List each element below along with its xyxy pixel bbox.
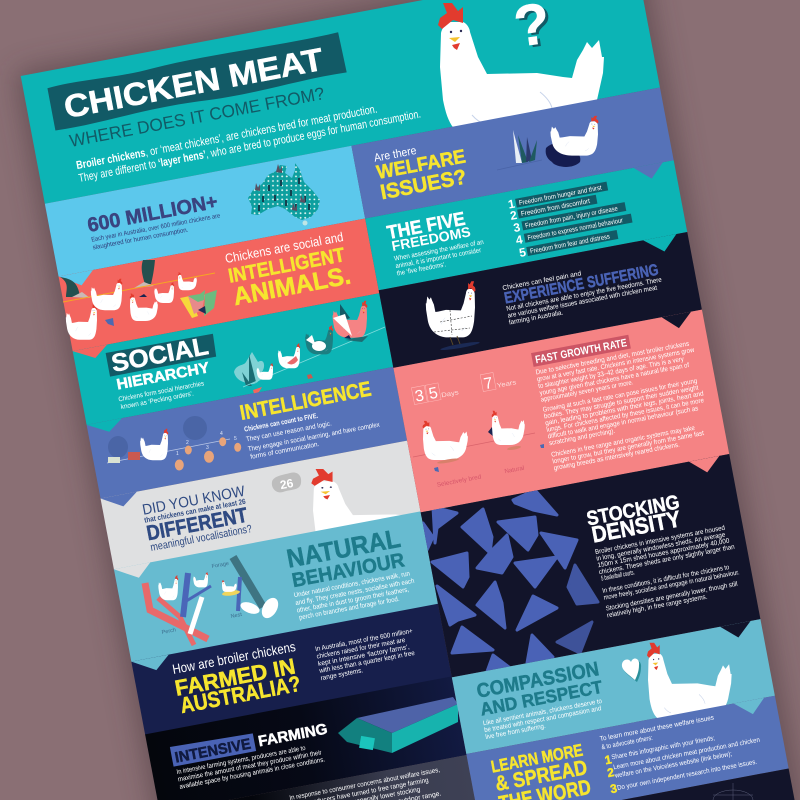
illustration: crowded hens from above [422, 490, 600, 671]
text: meaningful vocalisations? [149, 523, 253, 554]
icon: large hen [438, 3, 604, 140]
text: the ‘five freedoms’. [396, 261, 447, 278]
heading [170, 639, 305, 718]
list of freedoms: Freedom from pain, injury or disease [525, 205, 619, 230]
list of freedoms: Freedom from fear and distress [530, 233, 611, 255]
illustration: hen counting eggs: 3 [206, 445, 209, 451]
text: lungs. For chickens affected by these issues, it can be more [546, 397, 705, 434]
label: perch: Perch [161, 627, 176, 636]
text [482, 698, 605, 741]
heading [373, 136, 471, 204]
text: other, bathe in dust to groom their feathers, [296, 586, 410, 614]
text: 5 basketball courts. [601, 569, 635, 583]
text: longer to grow, but they are generally from the same fast [552, 430, 705, 465]
text: grow at a very fast rate. Chickens in intensive systems grow [536, 347, 695, 383]
heading: LEARN MORE [489, 741, 584, 776]
illustration: hen counting eggs: 4 [220, 431, 223, 437]
text: animal, it is important to consider [395, 247, 482, 270]
text: They engage in social learning, and have complex [247, 421, 381, 453]
panel: compassion and respect [451, 617, 778, 772]
text: to slaughter weight by 33–42 days of age. This is a very [538, 356, 685, 390]
map of Australia [248, 163, 320, 226]
subtitle: WHERE DOES IT COME FROM? [68, 83, 326, 151]
heading [224, 229, 353, 311]
list of freedoms: Freedom from hunger and thirst [518, 185, 602, 207]
illustration: hen and heart [622, 643, 732, 722]
illustration: two hens compared [413, 411, 544, 472]
heading [105, 331, 221, 394]
panel: intensive farming [145, 675, 478, 800]
text: DIFFERENT [145, 504, 249, 545]
text: be treated with respect and compassion and [484, 705, 602, 734]
panel: stocking density [420, 454, 760, 678]
illustration: natural behaviours [145, 557, 282, 645]
text: Share this infographic with your friends; [611, 735, 716, 761]
text: maximise the amount of meat they produce within their [177, 749, 323, 783]
heading: Chickens are social and [224, 229, 344, 266]
text: 2 [606, 765, 616, 780]
text: kept in intensive ‘factory farms’, [317, 644, 410, 668]
text: Chickens in free range and organic systems may take [551, 425, 696, 459]
heading: AUSTRALIA? [178, 671, 303, 718]
icon: target lines [713, 783, 753, 800]
heading: STOCKING [585, 491, 681, 530]
caption: known as ‘Pecking orders’. [120, 390, 194, 411]
statistic: 600 MILLION+ [86, 191, 219, 237]
heading: INTENSIVE [173, 736, 252, 767]
text: and fly. They create nests, socialise with each [295, 578, 415, 607]
list of freedoms: Freedom from discomfort [520, 198, 591, 218]
heading: FREEDOMS [390, 223, 472, 254]
text: Under natural conditions, chickens walk, run [293, 570, 411, 599]
list of freedoms: 4 [515, 232, 524, 247]
statistic caption: slaughtered for human consumption. [92, 227, 189, 252]
heading: NATURAL [284, 523, 403, 574]
panel: natural behaviour [113, 505, 440, 673]
text: To learn more about these welfare issues [599, 714, 715, 743]
title banner: CHICKEN MEAT [61, 41, 327, 125]
text: In these conditions, it is difficult for the chickens to [602, 564, 730, 595]
text: growing breeds as intensively reared chickens. [553, 442, 680, 472]
counter: 35 days: 3 [414, 387, 426, 406]
text: gain, leading to problems with their legs, joints, heart and [545, 390, 704, 427]
text: with less than a quarter kept in free [318, 650, 416, 675]
illustration: pecking order [234, 301, 385, 394]
caption [118, 380, 207, 411]
statistic caption [91, 212, 223, 252]
labels: selectively bred and natural [436, 465, 525, 489]
statistic caption: Each year in Australia, over 600 million chickens are [91, 212, 221, 244]
text: 1 [604, 752, 613, 767]
text: & to advocate others: [601, 735, 653, 751]
heading: COMPASSION [475, 658, 601, 703]
illustration: hen with speech bubble: 26 [279, 476, 295, 492]
heading: FAST GROWTH RATE [534, 337, 628, 366]
illustration: hen counting eggs: 1 [176, 451, 179, 457]
caption: Chickens form social hierarchies [118, 380, 205, 403]
illustration: hens on a perch [60, 260, 217, 340]
heading: THE FIVE [385, 209, 467, 244]
illustration: hen [426, 281, 480, 351]
labels: selectively bred and natural: Selectively bred [436, 473, 482, 489]
text: available space by housing animals in close conditions. [179, 756, 326, 791]
text [244, 402, 382, 461]
list of freedoms: Freedom to express normal behaviour [527, 217, 624, 242]
text: approximately seven years or more. [540, 379, 634, 404]
counter: 7 years: Years [496, 379, 518, 390]
list of freedoms: 3 [512, 220, 522, 235]
illustration: hen and plant [497, 116, 599, 170]
counter: 35 days: 5 [427, 385, 439, 403]
counter: 7 years: 7 [483, 375, 495, 393]
heading: BEHAVIOUR [290, 549, 407, 592]
title banner [47, 32, 347, 131]
text: Chickens can count to FIVE. [244, 413, 319, 434]
text: that chickens can make at least 26 [144, 497, 246, 525]
text: move freely, socialise and engage in natural behaviour. [603, 569, 740, 602]
text: Learn more about chicken meat production and chicken [613, 737, 761, 771]
panel: social hierarchy [69, 273, 402, 450]
heading: How are broiler chickens [171, 639, 297, 677]
intro text: They are different to ‘layer hens’, who are bred to produce eggs for human consumption. [78, 108, 422, 185]
panel: did you know [101, 433, 469, 620]
panel: footer [480, 768, 795, 800]
text: are various welfare issues associated with chicken meat [507, 285, 658, 320]
text: farming in Australia. [508, 309, 564, 327]
text [394, 239, 487, 278]
heading: & SPREAD [493, 756, 589, 796]
illustration: shed [338, 697, 458, 753]
text [314, 628, 419, 682]
heading: HIERARCHY [115, 359, 211, 393]
text: Stocking densities are generally lower, though still [605, 581, 739, 613]
heading [284, 523, 407, 592]
heading: WELFARE [375, 146, 467, 184]
counter: 35 days: Days [441, 389, 460, 399]
heading [170, 718, 329, 767]
text: Not all chickens are able to enjoy the five freedoms. There [506, 277, 663, 313]
panel: how are broilers farmed [131, 604, 452, 735]
text: Do your own independent research into these issues. [617, 759, 758, 792]
text: relatively high, in free range systems. [607, 594, 708, 619]
text: DID YOU KNOW [141, 483, 247, 519]
panel: intelligence [86, 362, 407, 499]
text [535, 340, 713, 472]
text: In Australia, most of the 600 million+ [315, 628, 413, 653]
heading: Are there [373, 145, 418, 165]
heading [585, 491, 685, 548]
list of freedoms: 1 [507, 197, 516, 212]
text: Growing at such a fast rate can pose issues for their young [542, 378, 698, 414]
heading [475, 658, 604, 720]
panel: welfare issues [351, 85, 674, 219]
heading: INTELLIGENT [227, 244, 347, 288]
text: Broiler chickens in intensive systems are housed [595, 525, 726, 556]
panel: experience suffering [379, 232, 702, 368]
list of freedoms [507, 176, 635, 260]
heading: ISSUES? [379, 166, 468, 204]
heading: SOCIAL [109, 332, 211, 378]
text: 150m x 15m shed houses approximately 40,000 [597, 538, 730, 569]
counter: 35 days [411, 379, 460, 406]
text: When assessing the welfare of an [394, 239, 484, 263]
heading: INTELLIGENCE [238, 378, 373, 425]
heading: FARMING [257, 721, 329, 750]
text: chickens raised for their meat are [316, 637, 406, 661]
text: welfare on the Voiceless website (link below); [614, 751, 733, 780]
intro text: Broiler chickens, or ‘meat chickens’, are chickens bred for meat production. [75, 104, 378, 172]
text [141, 483, 254, 554]
illustration: hen counting eggs [107, 416, 241, 470]
heading: Chickens can feel pain and [502, 270, 582, 292]
text [293, 570, 418, 622]
panel: 600 million [44, 144, 365, 276]
illustration: hen with speech bubble [272, 469, 452, 558]
text: 3 [609, 781, 619, 796]
text: forms of communication. [250, 441, 320, 461]
panel: five freedoms [365, 160, 687, 290]
heading: FARMED IN [173, 654, 297, 701]
panel: fast growth rate [393, 310, 729, 512]
text: chickens. These sheds are only slightly larger than [598, 544, 735, 576]
heading: DENSITY [589, 505, 683, 548]
panel: header [21, 0, 668, 244]
text: They can use reason and logic. [246, 420, 332, 443]
list of freedoms: 2 [509, 208, 518, 223]
panel: intelligent animals [45, 203, 382, 368]
heading [489, 740, 593, 800]
text: In intensive farming systems, producers are able to [176, 745, 306, 776]
text [595, 524, 744, 619]
labels: selectively bred and natural: Natural [504, 465, 525, 475]
text [599, 707, 765, 796]
counter: 7 years [480, 368, 518, 394]
heading: ANIMALS. [231, 261, 353, 311]
text: live free from suffering. [485, 723, 546, 741]
text: Like all sentient animals, chickens deserve to [482, 698, 603, 727]
text: range systems. [320, 667, 364, 682]
heading: EXPERIENCE SUFFERING [503, 262, 660, 307]
text: bodies. They may struggle to support their sudden weight [543, 384, 699, 420]
text: perch on branches and forage for food. [299, 596, 400, 622]
text: young age given that chickens have a natural life span of [539, 362, 690, 397]
label: forage: Forage [211, 561, 230, 570]
text: difficult to walk and engage in normal behaviour (such as [547, 405, 699, 441]
text: Due to selective breeding and diet, most broiler chickens [535, 341, 690, 376]
text: scratching and perching). [549, 428, 616, 447]
list of freedoms: 5 [518, 245, 527, 260]
illustration: hen counting eggs: 2 [186, 440, 189, 446]
panel: learn more [466, 696, 789, 800]
label: nest: Nest [230, 612, 243, 620]
heading: AND RESPECT [478, 677, 604, 720]
text: in long, generally windowless sheds. An average [596, 532, 726, 563]
illustration: hen counting eggs: 5 [234, 436, 237, 442]
